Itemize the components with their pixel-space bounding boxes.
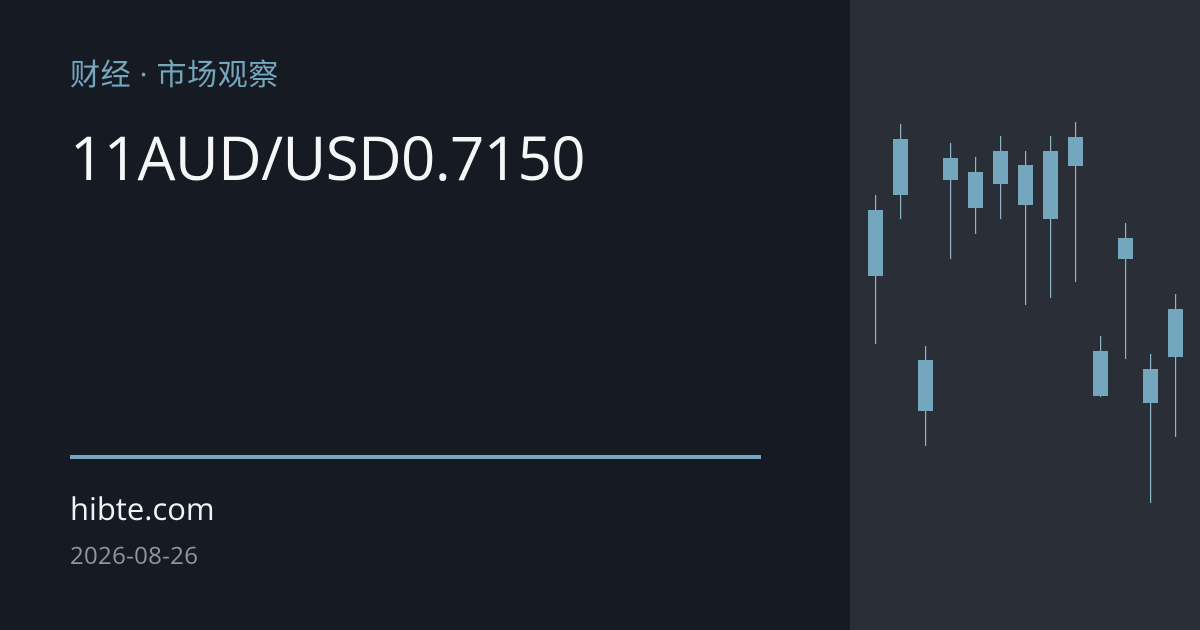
category label: 财经 · 市场观察 [70, 53, 279, 94]
panel: candlestick sidebar [850, 0, 1200, 630]
date: 2026-08-26 [70, 539, 198, 572]
candlestick chart [868, 122, 1183, 503]
title: 11AUD/USD0.7150 [70, 116, 585, 198]
divider [70, 455, 761, 459]
site name: hibte.com [70, 488, 215, 530]
